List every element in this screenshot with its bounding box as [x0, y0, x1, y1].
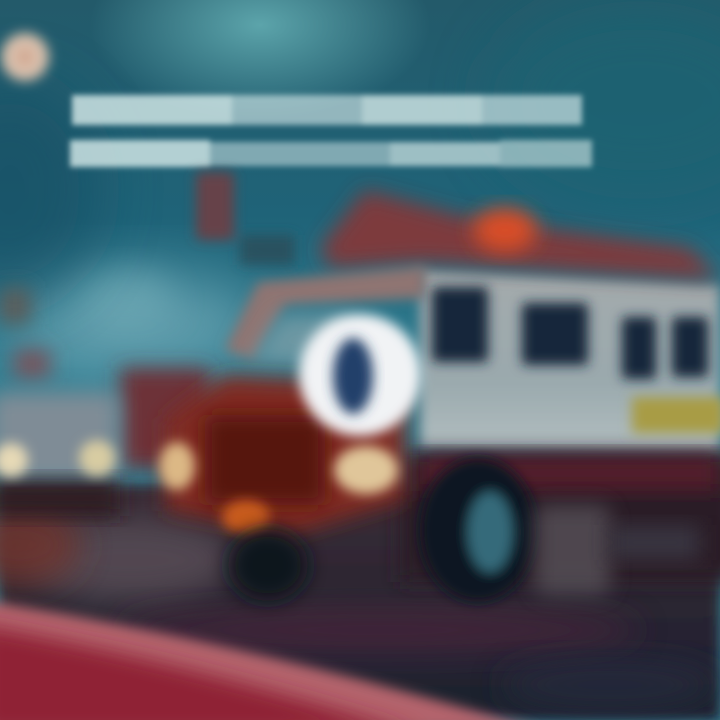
traffic light — [196, 172, 295, 265]
fire truck — [159, 190, 720, 602]
roof beacon — [473, 208, 537, 252]
truck roof — [320, 190, 720, 280]
logo badge — [1, 33, 49, 81]
distant signal and background vehicles — [0, 288, 210, 468]
truck body — [420, 270, 720, 455]
windows — [432, 287, 708, 379]
circular badge icon — [299, 314, 421, 436]
truck lower chassis — [400, 452, 720, 582]
yellow stripe — [632, 397, 720, 433]
lower equipment — [535, 505, 610, 595]
rear wheel — [420, 458, 536, 602]
front wheel — [228, 529, 308, 601]
grille — [205, 415, 325, 505]
ground and road — [0, 485, 720, 720]
title (illegible, blurred in the reference) — [70, 95, 592, 167]
left car — [0, 392, 120, 516]
windshield frame — [225, 266, 425, 360]
headlights — [159, 442, 398, 494]
cab — [165, 375, 405, 535]
windshield — [250, 312, 350, 368]
orange bumper light — [222, 500, 270, 534]
